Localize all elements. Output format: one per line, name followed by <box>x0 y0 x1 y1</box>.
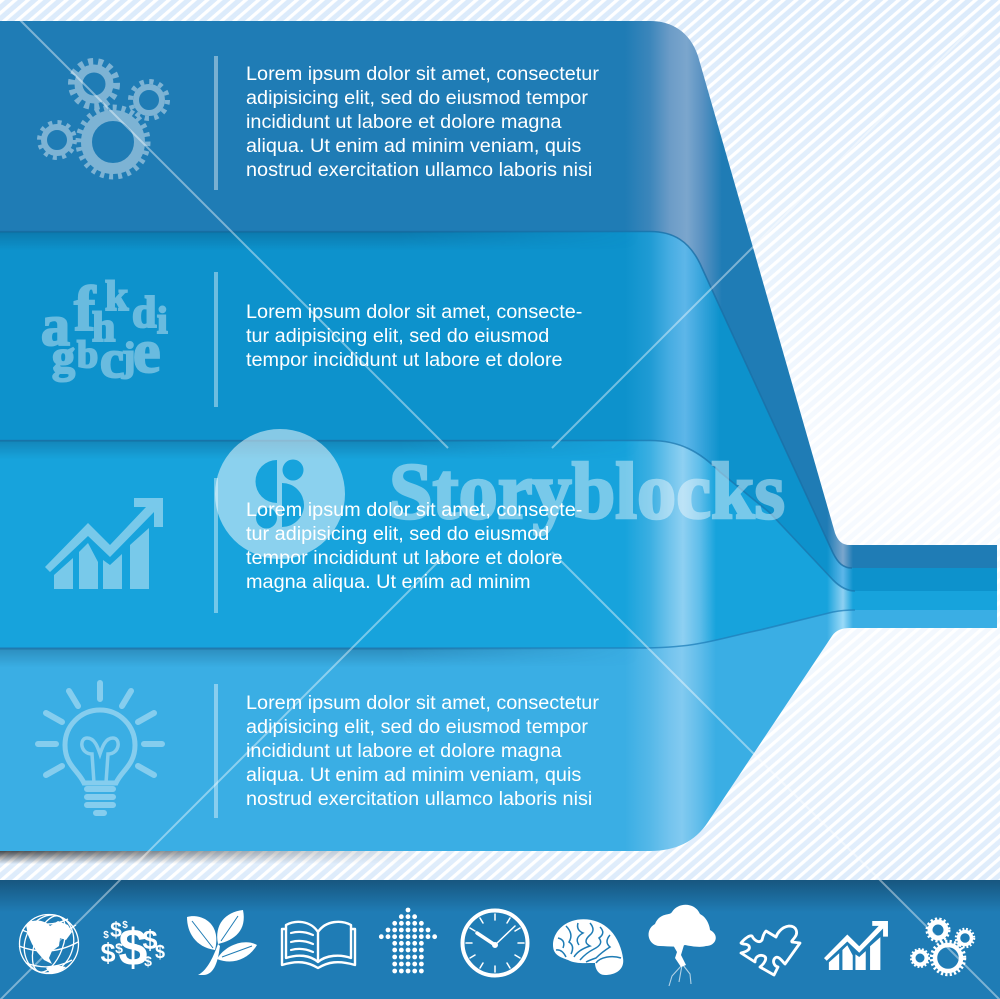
icon: faint light bulb <box>38 683 162 813</box>
text block 3: tur adipisicing elit, sed do eiusmod <box>246 523 549 545</box>
icon: faint letters: c <box>100 329 124 389</box>
text block 4: nostrud exercitation ullamco laboris nisi <box>246 788 592 810</box>
bottom shadow under bands <box>0 851 420 864</box>
icon: leaves <box>187 910 257 975</box>
text block 4 <box>246 692 599 810</box>
icon: growth chart <box>824 921 888 970</box>
text block 3: magna aliqua. Ut enim ad minim <box>246 571 531 593</box>
icon: dotted arrow <box>381 910 435 971</box>
icon: dollar signs <box>100 919 165 977</box>
text block 4: aliqua. Ut enim ad minim veniam, quis <box>246 764 581 786</box>
text block 1: adipisicing elit, sed do eiusmod tempor <box>246 87 588 109</box>
icon: faint letters: e <box>133 318 161 386</box>
text block 4: adipisicing elit, sed do eiusmod tempor <box>246 716 588 738</box>
panel: footer icon bar <box>0 880 1000 999</box>
icon: faint divider band 2 <box>214 272 218 407</box>
icon: dollar signs: $ <box>115 940 123 956</box>
icon: faint divider band 1 <box>214 56 218 190</box>
text block 2: tempor incididunt ut labore et dolore <box>246 349 563 371</box>
icon: open book <box>282 922 355 968</box>
panel: band 4 light blue <box>0 610 997 851</box>
text block 2: Lorem ipsum dolor sit amet, consecte- <box>246 301 582 323</box>
panel: band 3 bright blue <box>0 440 997 648</box>
panel: band 2 mid blue <box>0 230 997 591</box>
icon: brain <box>553 919 623 975</box>
icon: dollar signs: $ <box>119 919 148 977</box>
text block 3: tempor incididunt ut labore et dolore <box>246 547 563 569</box>
icon: faint letters <box>41 273 168 389</box>
icon: faint letters: d <box>132 288 156 337</box>
icon: faint divider band 3 <box>214 478 218 613</box>
icon: faint letters: h <box>92 305 115 351</box>
text block 4: incididunt ut labore et dolore magna <box>246 740 562 762</box>
icon: faint letters: g <box>52 331 75 382</box>
text block 2: tur adipisicing elit, sed do eiusmod <box>246 325 549 347</box>
text block 1: aliqua. Ut enim ad minim veniam, quis <box>246 135 581 157</box>
text block 3: Lorem ipsum dolor sit amet, consecte- <box>246 499 582 521</box>
watermark: wordmark: Storyblocks <box>389 448 785 536</box>
icon: faint letters: b <box>77 334 98 376</box>
watermark: logo circle <box>215 429 345 559</box>
text block 1: nostrud exercitation ullamco laboris nisi <box>246 159 592 181</box>
icon: faint letters: k <box>105 274 129 320</box>
icon: dollar signs: $ <box>100 938 116 968</box>
icon: puzzle piece <box>741 926 800 975</box>
text block 1: incididunt ut labore et dolore magna <box>246 111 562 133</box>
panel: band 1 dark blue <box>0 21 997 700</box>
icon: storm cloud <box>649 905 716 986</box>
icon: faint gears <box>40 62 168 176</box>
icon: dollar signs: $ <box>103 930 109 941</box>
text block 1 <box>246 63 599 181</box>
text block 4: Lorem ipsum dolor sit amet, consectetur <box>246 692 599 714</box>
icon: clock <box>462 910 528 976</box>
icon: dollar signs: $ <box>155 942 165 962</box>
icon: faint letters: f <box>74 273 96 344</box>
icon: faint letters: a <box>41 293 70 358</box>
text block 2 <box>246 301 582 371</box>
icon: gears <box>911 919 974 974</box>
icon: dollar signs: $ <box>144 953 152 969</box>
icon: faint letters: j <box>121 334 135 379</box>
icon: globe <box>16 908 82 980</box>
text block 3 <box>246 499 582 593</box>
icon: faint divider band 4 <box>214 684 218 818</box>
icon: faint letters: i <box>157 300 168 342</box>
icon: dollar signs: $ <box>110 919 122 942</box>
icon: dollar signs: $ <box>122 920 128 931</box>
text block 1: Lorem ipsum dolor sit amet, consectetur <box>246 63 599 85</box>
icon: faint growth chart <box>45 498 163 589</box>
icon: dollar signs: $ <box>142 925 158 955</box>
